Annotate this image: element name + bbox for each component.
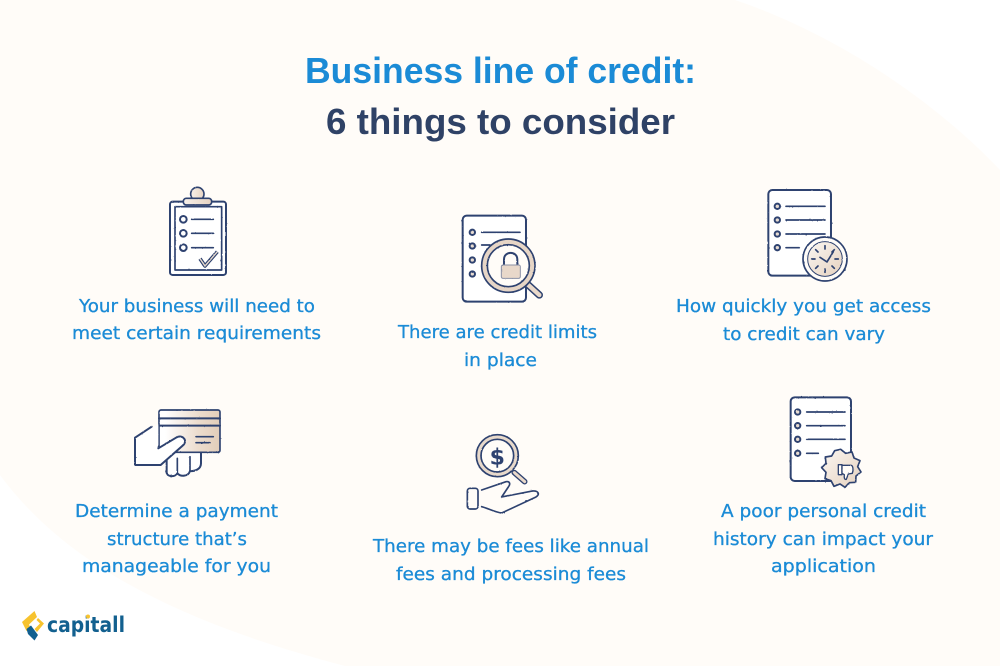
text: access speed: How quickly you get access <box>676 297 931 317</box>
title: Business line of credit: <box>305 50 696 91</box>
text: poor credit history: application <box>771 557 876 577</box>
text: access speed: to credit can vary <box>723 325 885 345</box>
icon: clipboard checklist <box>170 187 226 275</box>
text: payment structure: Determine a payment <box>75 502 278 522</box>
panel: requirements <box>72 187 321 344</box>
title: 6 things to consider <box>326 101 675 142</box>
text: credit limits: There are credit limits <box>397 323 597 343</box>
text: fees: fees and processing fees <box>396 565 626 585</box>
icon: document with magnifier and lock <box>463 216 539 302</box>
panel: payment structure <box>75 410 278 577</box>
text: credit limits <box>397 323 597 371</box>
text: fees <box>372 537 649 585</box>
text: requirements: Your business will need to <box>78 297 315 317</box>
icon: document with clock <box>768 190 847 281</box>
text: payment structure: manageable for you <box>82 557 271 577</box>
text: credit limits: in place <box>464 351 537 371</box>
icon: hand holding card <box>135 410 220 476</box>
logo wordmark: capitall <box>47 613 125 637</box>
panel: access speed <box>676 190 931 345</box>
text: poor credit history: history can impact your <box>713 530 934 550</box>
panel: poor credit history <box>713 397 934 577</box>
panel: credit limits <box>397 216 597 371</box>
text: fees: There may be fees like annual <box>372 537 649 557</box>
logo mark <box>22 611 44 640</box>
title <box>305 50 696 142</box>
text: poor credit history: A poor personal credit <box>721 502 926 522</box>
panel: fees <box>372 435 649 585</box>
icon: hand with magnified dollar: $ <box>490 445 505 470</box>
icon: document with thumbs-down badge <box>791 397 861 487</box>
text: payment structure: structure that’s <box>107 530 247 550</box>
text: access speed <box>676 297 931 345</box>
text: poor credit history <box>713 502 934 577</box>
logo: capitall <box>22 611 125 640</box>
text: requirements: meet certain requirements <box>72 324 321 344</box>
text: payment structure <box>75 502 278 577</box>
text: requirements <box>72 297 321 344</box>
icon: hand with magnified dollar <box>467 435 538 513</box>
